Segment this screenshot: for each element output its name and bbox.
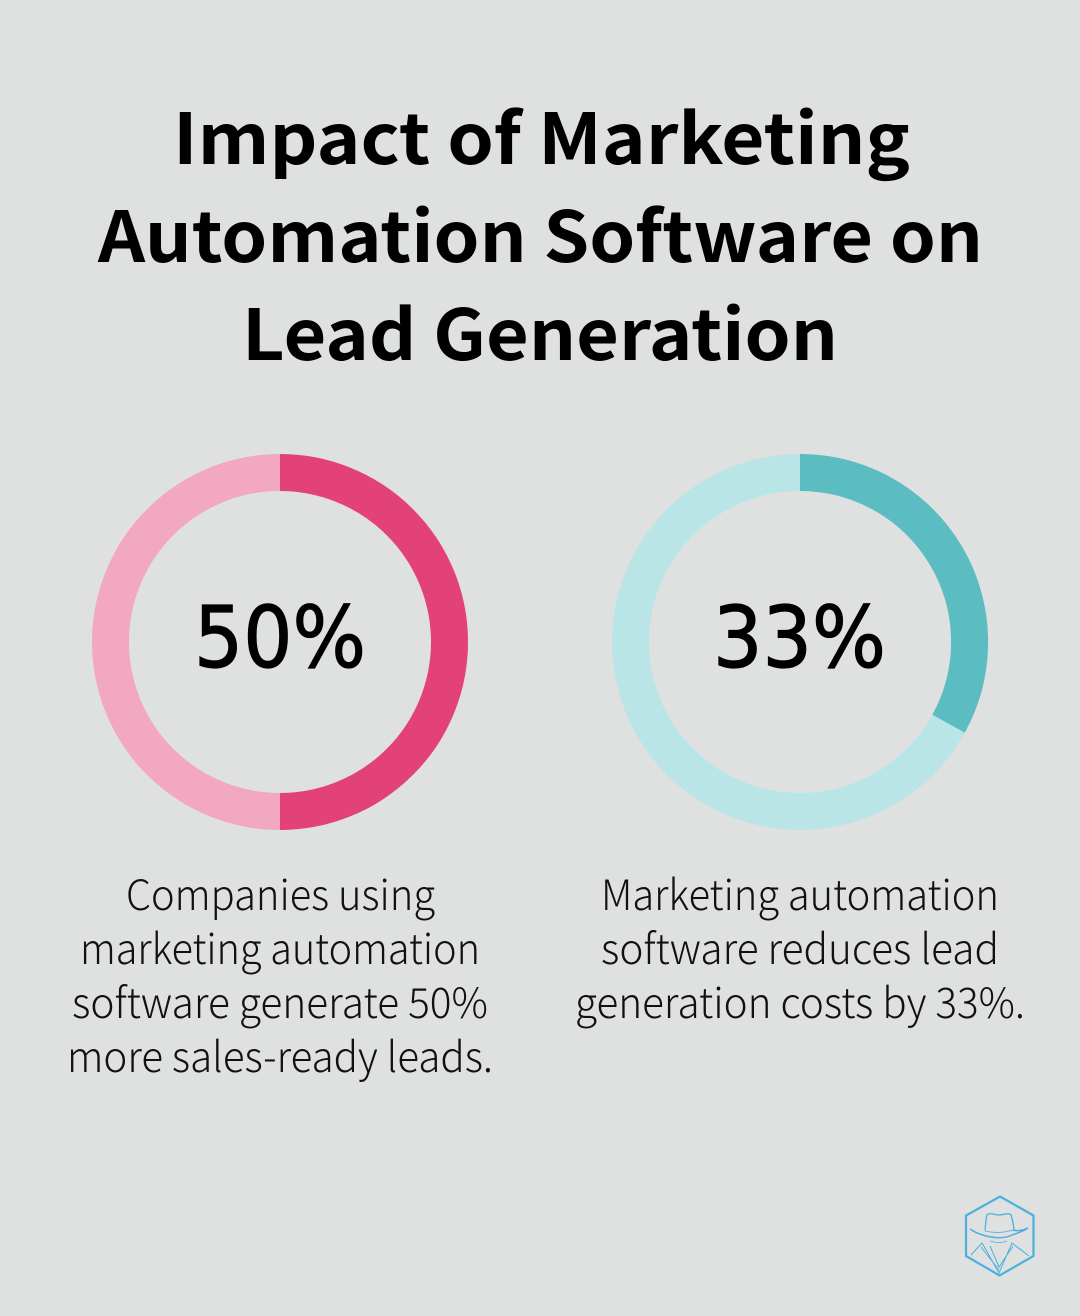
description: 33%: software reduces lead: [601, 916, 999, 977]
panel: 33% statistic: [575, 472, 1025, 1031]
icon: hexagon spy logo: [966, 1196, 1034, 1276]
description: 33%: Marketing automation: [601, 862, 999, 923]
description: 50%: [67, 862, 493, 1085]
panel: 50% statistic: [67, 472, 493, 1085]
title: Lead Generation: [242, 280, 838, 381]
description: 50%: more sales-ready leads.: [67, 1024, 493, 1085]
description: 33%: generation costs by 33%.: [575, 970, 1025, 1031]
donut chart: 33%: [630, 472, 970, 812]
title: Impact of Marketing: [173, 84, 910, 185]
donut chart: 50%: [110, 472, 450, 812]
description: 50%: software generate 50%: [72, 970, 488, 1031]
description: 50%: marketing automation: [80, 916, 480, 977]
description: 50%: Companies using: [126, 862, 435, 923]
description: 33%: [575, 862, 1025, 1031]
value: 50%: 50%: [194, 589, 366, 688]
title: [97, 84, 983, 381]
value: 33%: 33%: [713, 589, 886, 688]
title: Automation Software on: [97, 182, 983, 283]
